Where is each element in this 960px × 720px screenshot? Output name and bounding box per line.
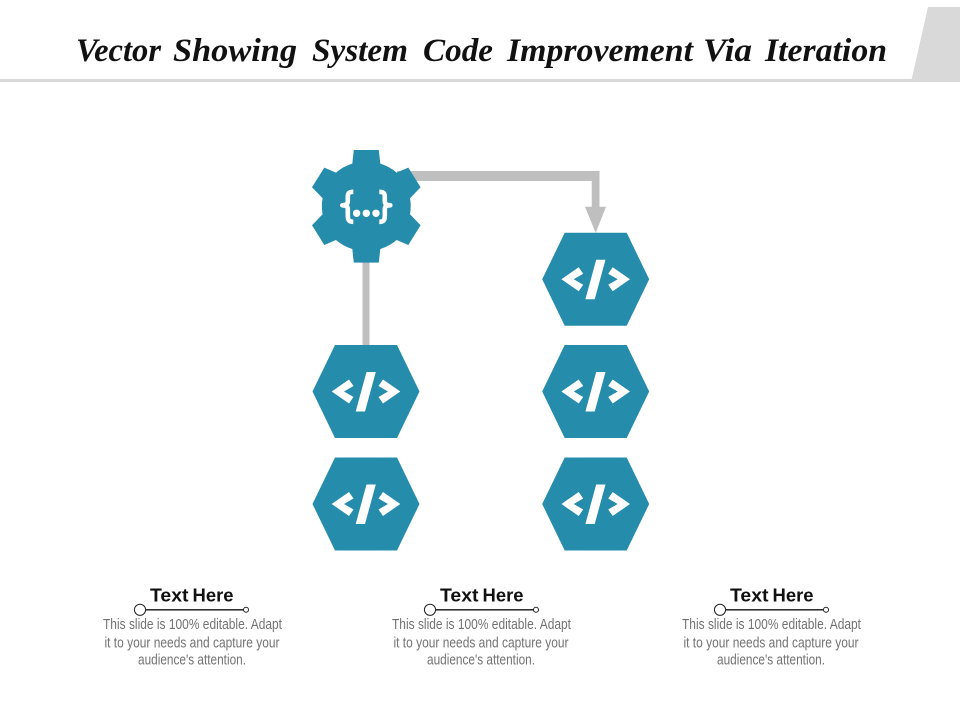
icon: code hexagon middle left <box>312 345 420 438</box>
text block: left: audience's attention. <box>138 652 246 668</box>
title: System <box>312 33 408 69</box>
title: Vector <box>76 33 162 69</box>
title: Iteration <box>764 33 887 69</box>
arrow: gear to top right hexagon <box>397 171 606 233</box>
text block: left: Here <box>192 584 234 606</box>
text block: left <box>103 584 283 668</box>
text block: right <box>682 584 862 668</box>
text block: center: Text <box>440 584 478 606</box>
icon: gear with braces <box>312 150 421 263</box>
icon: code hexagon middle right <box>542 345 649 438</box>
icon: code hexagon bottom right <box>542 458 649 550</box>
text block: right: Here <box>772 584 814 606</box>
text block: right: it to your needs and capture your <box>684 634 858 652</box>
text block: left: This slide is 100% editable. Adapt <box>103 616 283 633</box>
icon: code hexagon top right <box>542 233 649 326</box>
text block: center <box>392 584 572 668</box>
title: Improvement <box>506 33 694 69</box>
header band <box>0 7 960 82</box>
icon: code hexagon bottom left <box>312 458 420 550</box>
text block: center: it to your needs and capture your <box>394 634 568 652</box>
text block: left: it to your needs and capture your <box>104 634 280 652</box>
title: Showing <box>173 33 297 69</box>
title: Code <box>423 33 493 69</box>
text block: center: audience's attention. <box>427 652 535 668</box>
connector: gear down to lower left hexagon <box>362 260 370 346</box>
text block: right: Text <box>730 584 768 606</box>
text block: center: Here <box>482 584 524 606</box>
text block: left: Text <box>150 584 188 606</box>
text block: right: audience's attention. <box>717 652 825 668</box>
text block: center: This slide is 100% editable. Adapt <box>392 616 572 633</box>
title: Via <box>703 33 752 69</box>
text block: right: This slide is 100% editable. Adapt <box>682 616 862 633</box>
